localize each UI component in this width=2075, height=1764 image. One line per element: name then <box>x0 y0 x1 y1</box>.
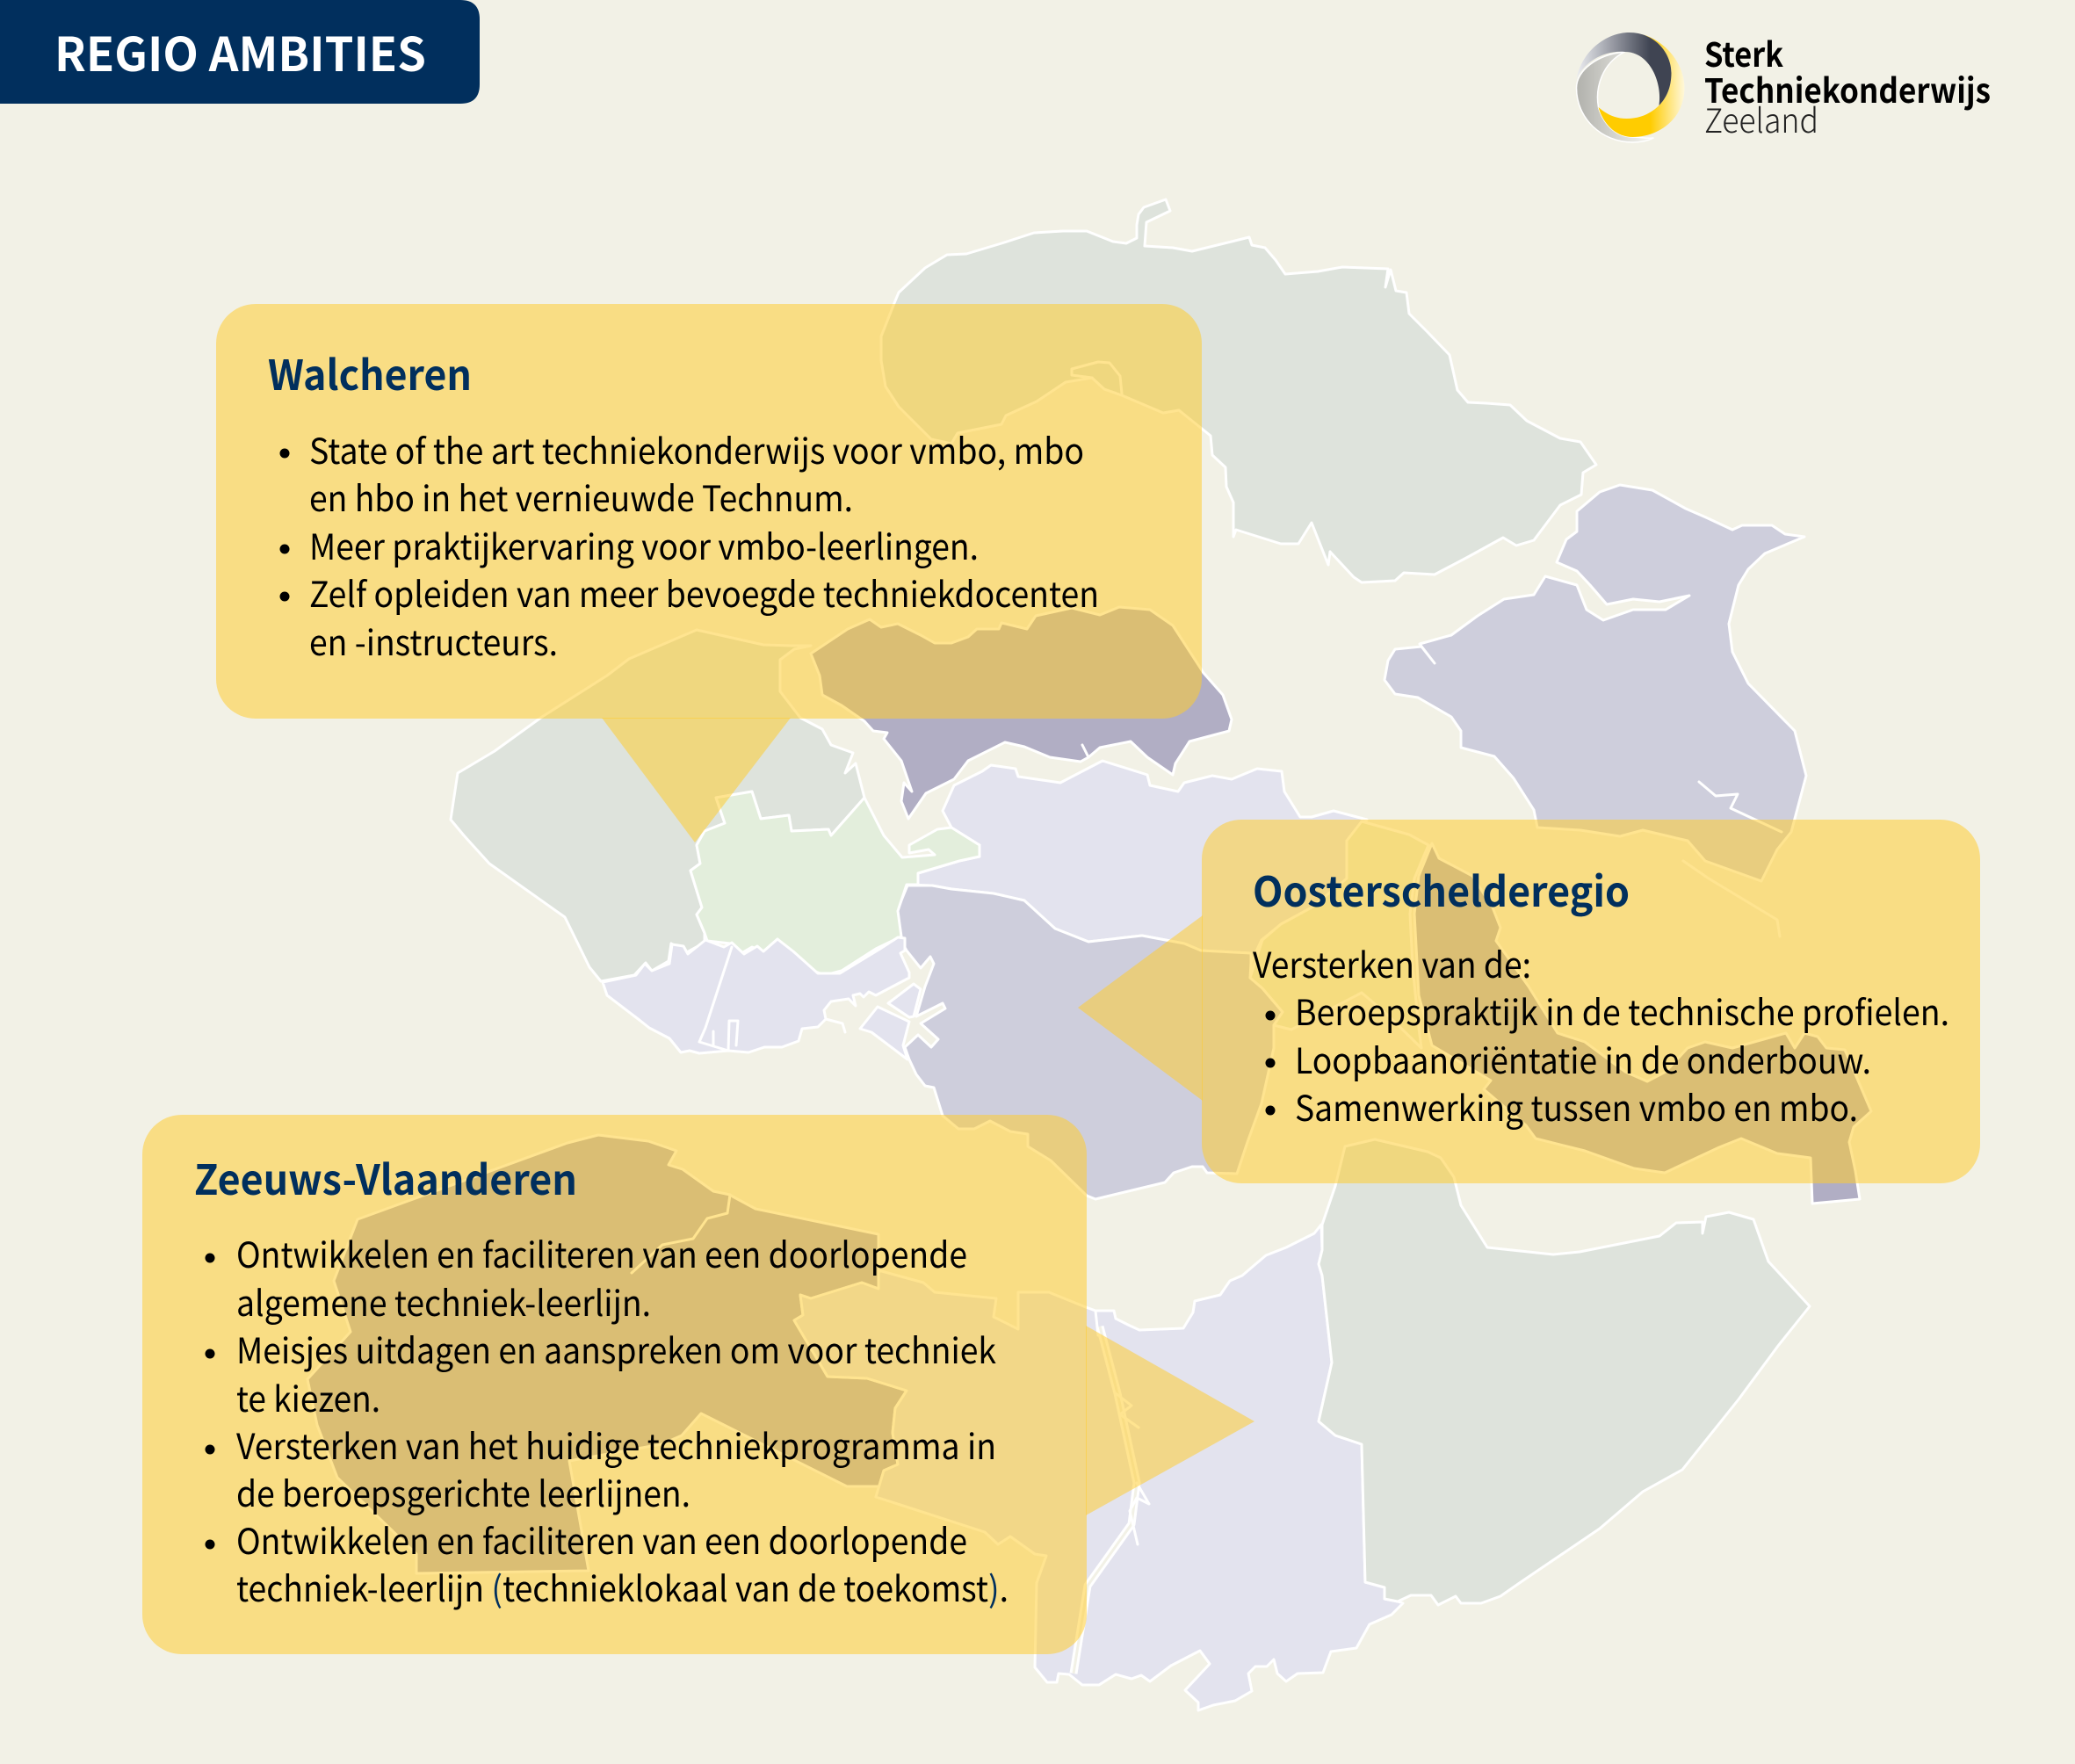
arrow: Oosterschelderegio pointer <box>1078 915 1203 1101</box>
region: Noord-Beveland south <box>907 761 1367 963</box>
region: Middelburg <box>690 792 980 975</box>
heading: Zeeuws-Vlaanderen: Zeeuws-Vlaanderen <box>194 1146 577 1207</box>
region: Goes <box>897 886 1283 1199</box>
title: REGIO AMBITIES <box>54 18 426 85</box>
bullet list: Zeeuws-Vlaanderen: Versterken van het huidige techniekprogramma in <box>236 1419 996 1470</box>
icon: ring <box>1576 33 1685 142</box>
heading: Oosterschelderegio: Oosterschelderegio <box>1253 858 1630 919</box>
logo text <box>1704 28 1991 142</box>
bullet list: Zeeuws-Vlaanderen: techniek-leerlijn (technieklokaal van de toekomst). <box>236 1561 1009 1612</box>
region: Sluis <box>307 1135 907 1573</box>
bullet list: Zeeuws-Vlaanderen: de beroepsgerichte leerlijnen. <box>236 1466 690 1517</box>
heading: Walcheren: Walcheren <box>268 342 472 402</box>
region: Noord-Beveland north <box>811 607 1232 819</box>
bullet list: Walcheren <box>279 423 1099 666</box>
bullet list: Zeeuws-Vlaanderen: algemene techniek-leerlijn. <box>236 1276 651 1327</box>
region: Terneuzen <box>794 1225 1403 1710</box>
region: Reimerswaal <box>1414 843 1871 1204</box>
bullet list: Walcheren: Meer praktijkervaring voor vmbo-leerlingen. <box>309 519 979 570</box>
arrow: Zeeuws-Vlaanderen pointer <box>1086 1326 1254 1515</box>
region: Borsele <box>603 937 921 1059</box>
bullet list: Walcheren: en -instructeurs. <box>309 615 558 666</box>
bullet list: Zeeuws-Vlaanderen: te kiezen. <box>236 1371 380 1422</box>
bullet list: Zeeuws-Vlaanderen: Ontwikkelen en faciliteren van een doorlopende <box>236 1514 967 1565</box>
panel: Zeeuws-Vlaanderen <box>142 1115 1254 1654</box>
region: Tholen <box>1385 485 1806 936</box>
bullet list: Zeeuws-Vlaanderen: Ontwikkelen en faciliteren van een doorlopende <box>236 1227 967 1278</box>
bullet list: Oosterschelderegio: Loopbaanoriëntatie in de onderbouw. <box>1295 1033 1871 1084</box>
bullet list: Zeeuws-Vlaanderen: Meisjes uitdagen en aanspreken om voor techniek <box>236 1323 996 1374</box>
logo: Sterk Techniekonderwijs Zeeland <box>1576 28 1991 142</box>
logo text: Sterk <box>1704 28 1783 76</box>
bullet list: Oosterschelderegio: Samenwerking tussen vmbo en mbo. <box>1295 1081 1858 1131</box>
bullet list: Oosterschelderegio <box>1265 985 1949 1131</box>
bullet list: Walcheren: Zelf opleiden van meer bevoegde techniekdocenten <box>309 567 1099 618</box>
region: Kapelle <box>1250 821 1428 1048</box>
bullet list: Walcheren: en hbo in het vernieuwde Technum. <box>309 471 853 522</box>
panel: Oosterschelderegio <box>1078 820 1980 1183</box>
logo text: Zeeland <box>1704 94 1818 142</box>
logo text: Techniekonderwijs <box>1704 64 1991 112</box>
header banner <box>0 0 480 104</box>
bullet list: Oosterschelderegio: Beroepspraktijk in de technische profielen. <box>1295 985 1949 1036</box>
intro text: Versterken van de: <box>1253 937 1531 988</box>
bullet list: Walcheren: State of the art techniekonderwijs voor vmbo, mbo <box>309 423 1084 474</box>
region: Schouwen-Duiveland <box>881 199 1596 582</box>
region: Hulst <box>1319 1139 1810 1605</box>
panel: Walcheren <box>216 304 1202 842</box>
region: Walcheren west <box>451 630 864 981</box>
arrow: Walcheren pointer <box>602 718 791 842</box>
bullet list: Zeeuws-Vlaanderen <box>206 1227 1009 1612</box>
map of Zeeland <box>307 199 1871 1710</box>
